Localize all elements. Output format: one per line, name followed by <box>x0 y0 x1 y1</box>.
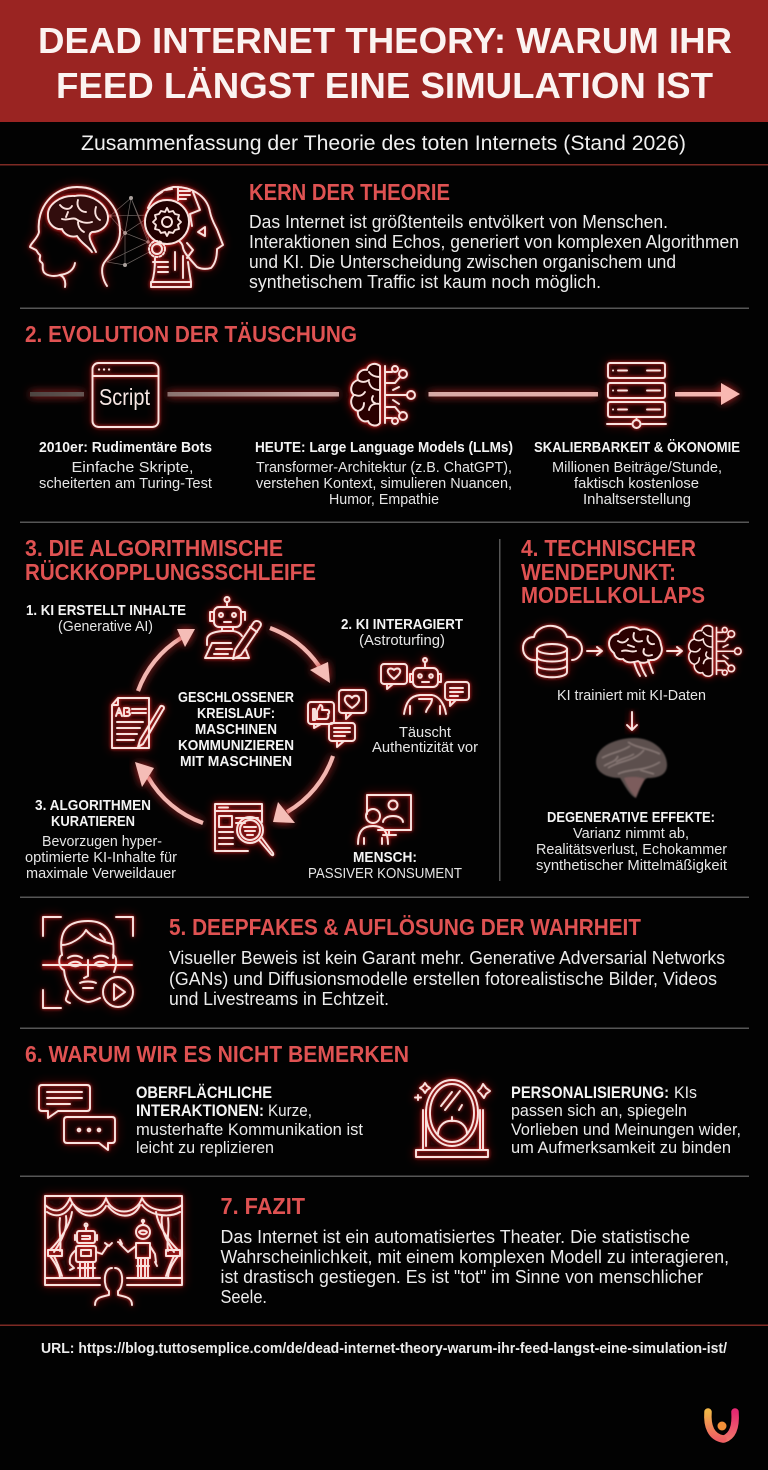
timeline step 3 <box>534 439 740 508</box>
text block: (GANs) und Diffusionsmodelle erstellen fotorealistische Bilder, Videos <box>169 969 717 989</box>
timeline step 2: HEUTE: Large Language Models (LLMs) <box>255 439 513 456</box>
heading: 3. DIE ALGORITHMISCHE <box>25 535 283 561</box>
heading: MODELLKOLLAPS <box>521 582 705 608</box>
text block: und Livestreams in Echtzeit. <box>169 989 389 1009</box>
text: Oberflächliche Interaktionen: Kurze, <box>268 1101 312 1120</box>
caption: KI trainiert mit KI-Daten <box>557 687 706 704</box>
label: Algorithmen kuratieren: optimierte KI-Inhalte für <box>25 849 177 866</box>
heading: 6. WARUM WIR ES NICHT BEMERKEN <box>25 1041 409 1067</box>
heading: KERN DER THEORIE <box>249 179 450 205</box>
text: Personalisierung: PERSONALISIERUNG: <box>511 1083 669 1102</box>
timeline step 2: Transformer-Architektur (z.B. ChatGPT), <box>256 459 512 476</box>
text block <box>169 948 725 1009</box>
heading <box>521 535 705 608</box>
icon: document <box>112 698 164 748</box>
arrow <box>667 647 682 655</box>
timeline step 3: Millionen Beiträge/Stunde, <box>552 459 722 476</box>
text block: synthetischem Traffic ist kaum noch möglich. <box>249 272 601 292</box>
icon: social reaction bubbles <box>308 690 366 747</box>
effects text <box>536 809 728 874</box>
text block <box>249 212 739 292</box>
icon: mirror <box>415 1080 490 1157</box>
effects text: DEGENERATIVE EFFEKTE: <box>547 809 715 826</box>
heading: 5. DEEPFAKES & AUFLÖSUNG DER WAHRHEIT <box>169 914 641 940</box>
heading <box>25 535 316 585</box>
panel: Rückkopplungsschleife <box>25 535 478 882</box>
panel: Kern der Theorie <box>30 179 739 292</box>
heading: WENDEPUNKT: <box>521 559 676 585</box>
text: Oberflächliche Interaktionen: INTERAKTIONEN: <box>136 1101 264 1120</box>
timeline step 2: Humor, Empathie <box>329 491 439 508</box>
arrow down <box>627 712 637 730</box>
label: Algorithmen kuratieren <box>25 797 177 882</box>
text: Personalisierung <box>511 1083 741 1157</box>
subtitle: Zusammenfassung der Theorie des toten Internets (Stand 2026) <box>81 131 686 155</box>
effects text: Realitätsverlust, Echokammer <box>536 841 727 858</box>
icon: brain network <box>351 364 415 425</box>
icon: human at screen <box>358 795 411 844</box>
icon: robot with chat bubbles <box>381 658 469 714</box>
feedback loop arrows <box>135 628 333 823</box>
timeline step 1 <box>39 439 213 492</box>
icon: brain network small <box>689 626 741 676</box>
icon: face scan <box>42 917 133 1008</box>
icon: script window: Script <box>99 384 151 410</box>
timeline step 3: SKALIERBARKEIT & ÖKONOMIE <box>534 439 740 456</box>
label: Mensch: MENSCH: <box>353 849 417 866</box>
label: KI interagiert <box>341 616 463 649</box>
icon: brain <box>609 627 662 676</box>
centre label <box>178 689 294 770</box>
centre label: GESCHLOSSENER <box>178 689 294 706</box>
title: DEAD INTERNET THEORY: WARUM IHR <box>38 20 732 61</box>
label: KI interagiert: (Astroturfing) <box>359 632 445 649</box>
icon: script window <box>92 363 158 427</box>
icon: robot writing <box>205 597 261 659</box>
text: Personalisierung: KIs <box>674 1083 697 1102</box>
title: FEED LÄNGST EINE SIMULATION IST <box>56 65 713 106</box>
timeline step 1: Einfache Skripte, <box>72 459 194 476</box>
heading: 2. EVOLUTION DER TÄUSCHUNG <box>25 321 357 347</box>
label: Algorithmen kuratieren: KURATIEREN <box>51 813 135 830</box>
heading: RÜCKKOPPLUNGSSCHLEIFE <box>25 559 316 585</box>
text block: Wahrscheinlichkeit, mit einem komplexen Modell zu interagieren, <box>220 1247 729 1267</box>
icon: degraded brain <box>596 738 667 798</box>
text: Oberflächliche Interaktionen <box>136 1083 363 1157</box>
heading: 7. FAZIT <box>220 1193 305 1219</box>
text block <box>220 1227 729 1307</box>
note: Täuscht Authentizität <box>372 724 478 756</box>
label: KI interagiert: 2. KI INTERAGIERT <box>341 616 463 633</box>
note: Täuscht Authentizität: Authentizität vor <box>372 739 478 756</box>
heading: 4. TECHNISCHER <box>521 535 696 561</box>
label: Algorithmen kuratieren: maximale Verweildauer <box>26 865 176 882</box>
label: KI erstellt Inhalte: (Generative AI) <box>58 618 153 635</box>
title <box>38 20 732 106</box>
icon: human head and robot head <box>30 187 223 287</box>
panel: Warum wir es nicht bemerken <box>25 1041 741 1157</box>
icon: logo <box>708 1412 735 1439</box>
centre label: MIT MASCHINEN <box>180 753 292 770</box>
text: Oberflächliche Interaktionen: leicht zu replizieren <box>136 1138 274 1157</box>
timeline step 3: Inhaltserstellung <box>583 491 691 508</box>
timeline step 2: verstehen Kontext, simulieren Nuancen, <box>256 475 512 492</box>
text block: ist drastisch gestiegen. Es ist "tot" im Sinne von menschlicher <box>220 1267 703 1287</box>
note: Täuscht Authentizität: Täuscht <box>399 724 452 741</box>
centre label: KREISLAUF: <box>197 705 275 722</box>
text block: Das Internet ist ein automatisiertes Theater. Die statistische <box>220 1227 690 1247</box>
text block: und KI. Die Unterscheidung zwischen organischem und <box>249 252 676 272</box>
icon: chat bubbles <box>39 1085 115 1150</box>
effects text: Varianz nimmt ab, <box>573 825 689 842</box>
label: Algorithmen kuratieren: Bevorzugen hyper- <box>42 833 162 850</box>
url footer: URL: https://blog.tuttosemplice.com/de/dead-internet-theory-warum-ihr-feed-langst-eine-simulation-ist/ <box>41 1341 727 1357</box>
arrow <box>587 647 602 655</box>
label: Algorithmen kuratieren: 3. ALGORITHMEN <box>35 797 151 814</box>
label: KI erstellt Inhalte: 1. KI ERSTELLT INHALTE <box>26 602 186 619</box>
text block: Seele. <box>220 1287 267 1307</box>
panel: Deepfakes <box>42 914 725 1009</box>
panel: Modellkollaps <box>521 535 741 874</box>
panel: Fazit <box>45 1193 729 1307</box>
icon: theater with robots <box>45 1196 182 1305</box>
label: Mensch <box>308 849 462 882</box>
text: Personalisierung: um Aufmerksamkeit zu binden <box>511 1138 731 1157</box>
text: Oberflächliche Interaktionen: OBERFLÄCHLICHE <box>136 1083 272 1102</box>
text: Personalisierung: passen sich an, spiegeln <box>511 1101 687 1120</box>
centre label: MASCHINEN <box>195 721 277 738</box>
text block: Interaktionen sind Echos, generiert von komplexen Algorithmen <box>249 232 739 252</box>
text: Oberflächliche Interaktionen: musterhafte Kommunikation ist <box>136 1120 363 1139</box>
timeline arrow <box>30 383 740 405</box>
text block: Das Internet ist größtenteils entvölkert von Menschen. <box>249 212 668 232</box>
label: KI erstellt Inhalte <box>26 602 186 635</box>
timeline step 2 <box>255 439 513 508</box>
header band <box>0 0 768 122</box>
label: Mensch: PASSIVER KONSUMENT <box>308 865 462 882</box>
timeline step 1: 2010er: Rudimentäre Bots <box>39 439 212 456</box>
centre label: KOMMUNIZIEREN <box>178 737 294 754</box>
timeline step 3: faktisch kostenlose <box>574 475 699 492</box>
text block: Visueller Beweis ist kein Garant mehr. Generative Adversarial Networks <box>169 948 725 968</box>
timeline step 1: scheiterten am Turing-Test <box>39 475 213 492</box>
panel: Evolution der Täuschung <box>25 321 740 508</box>
icon: server stack <box>607 363 666 428</box>
icon: browser with magnifier <box>215 804 273 855</box>
effects text: synthetischer Mittelmäßigkeit <box>536 857 728 874</box>
text: Personalisierung: Vorlieben und Meinungen wider, <box>511 1120 741 1139</box>
icon: cloud database <box>523 626 582 677</box>
